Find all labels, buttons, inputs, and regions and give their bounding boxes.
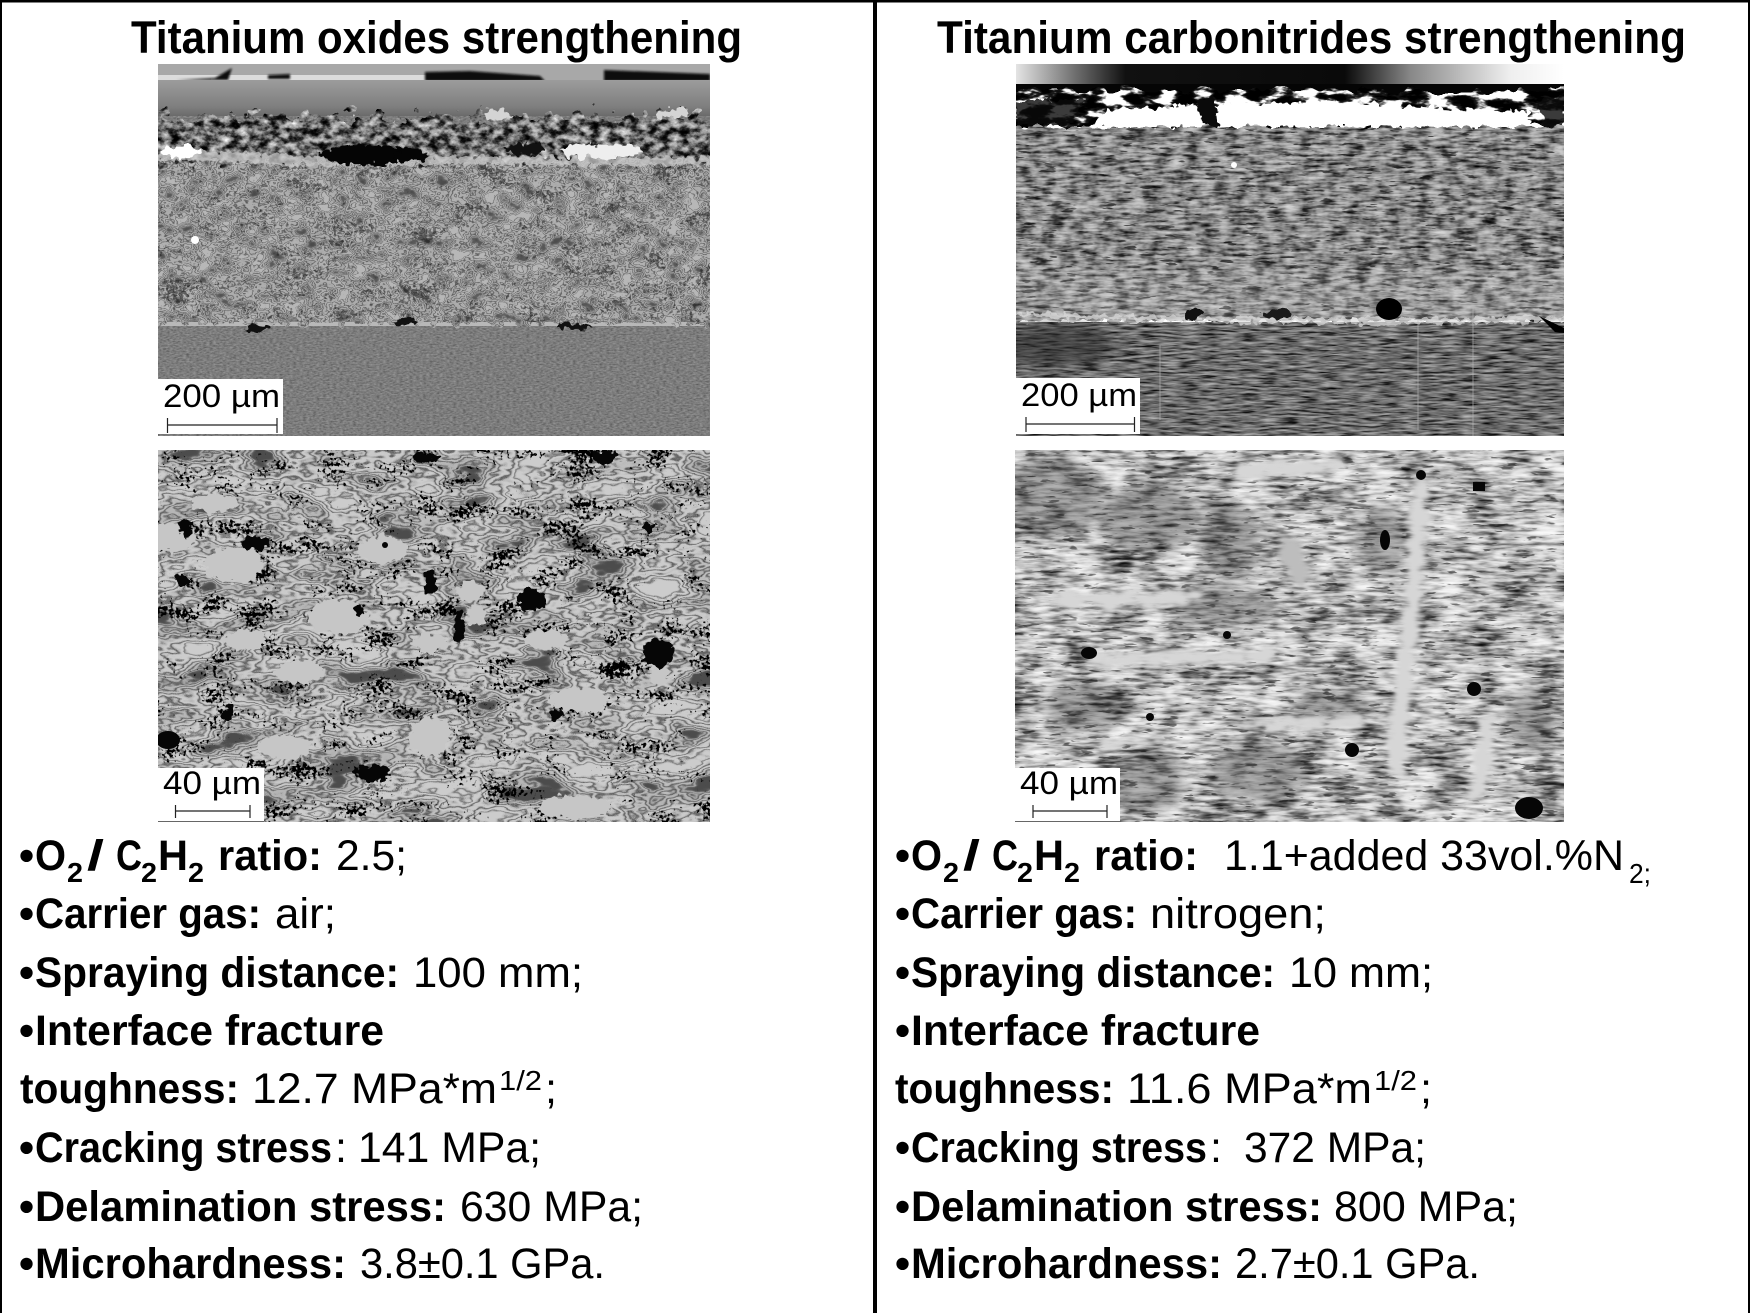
panel: titanium carbonitrides strengthening — [895, 12, 1686, 1288]
property: microhardness: 2.7±0.1 GPa. — [1235, 1240, 1480, 1288]
property: interface fracture toughness: toughness: — [20, 1065, 239, 1113]
scale label: 40 µm: 40 µm — [163, 765, 261, 801]
scale label: 40 µm — [158, 765, 264, 822]
property: interface fracture toughness: Interface fracture — [35, 1007, 384, 1055]
property: O2/C2H2 ratio: 2.5; — [336, 832, 407, 880]
property: O2/C2H2 ratio: 2 — [188, 857, 204, 888]
property: O2/C2H2 ratio: 2 — [67, 857, 83, 888]
property: O2/C2H2 ratio: O — [911, 832, 942, 880]
panel: titanium oxides strengthening — [19, 12, 742, 1288]
property: O2/C2H2 ratio: • — [19, 832, 34, 880]
property: spraying distance: 10 mm; — [1289, 949, 1433, 997]
scale label: 200 µm: 200 µm — [1021, 377, 1137, 413]
property: O2/C2H2 ratio: C — [116, 832, 142, 880]
property: delamination stress: 630 MPa; — [460, 1183, 643, 1231]
property list: oxides — [19, 832, 643, 1288]
property list: carbonitrides — [895, 832, 1651, 1288]
property: cracking stress: 141 MPa; — [358, 1124, 541, 1172]
property: microhardness: • — [895, 1240, 910, 1288]
property: delamination stress: Delamination stress: — [911, 1183, 1322, 1231]
property: interface fracture toughness — [895, 1007, 1432, 1113]
property: O2/C2H2 ratio: C — [992, 832, 1018, 880]
property: carrier gas: Carrier gas: — [911, 890, 1137, 938]
property: O2/C2H2 ratio: • — [895, 832, 910, 880]
property: microhardness: 3.8±0.1 GPa. — [360, 1240, 605, 1288]
micrograph: oxide coating cross-section, 200 µm — [140, 64, 730, 436]
property: O2/C2H2 ratio: H — [1034, 832, 1064, 880]
property: carrier gas: • — [19, 890, 34, 938]
property: O2/C2H2 ratio: O — [35, 832, 66, 880]
property: carrier gas: • — [895, 890, 910, 938]
property: O2/C2H2 ratio: 2; — [1629, 858, 1651, 889]
property: spraying distance: Spraying distance: — [35, 949, 399, 997]
property: delamination stress: • — [895, 1183, 910, 1231]
property: microhardness — [19, 1240, 605, 1288]
property: O2/C2H2 ratio: / — [963, 832, 980, 880]
micrograph: carbonitride coating cross-section, 200 µm — [995, 64, 1580, 436]
property: cracking stress: : — [1210, 1124, 1222, 1172]
property: spraying distance: • — [19, 949, 34, 997]
property: interface fracture toughness: • — [19, 1007, 34, 1055]
property: carrier gas: air; — [275, 890, 336, 938]
property: O2/C2H2 ratio: 2 — [1064, 857, 1080, 888]
property: microhardness: Microhardness: — [911, 1240, 1222, 1288]
property: carrier gas — [895, 890, 1326, 938]
property: interface fracture toughness: 11.6 MPa*m — [1127, 1065, 1372, 1113]
property: spraying distance — [19, 949, 583, 997]
property: carrier gas: Carrier gas: — [35, 890, 261, 938]
property: O2/C2H2 ratio: H — [158, 832, 188, 880]
property: cracking stress — [19, 1124, 541, 1172]
property: O2/C2H2 ratio: ratio: — [218, 832, 322, 880]
property: microhardness — [895, 1240, 1480, 1288]
property: O2/C2H2 ratio: 2 — [141, 857, 157, 888]
scale label: 200 µm — [1016, 377, 1140, 434]
property: delamination stress: Delamination stress: — [35, 1183, 446, 1231]
scale label: 40 µm: 40 µm — [1020, 765, 1118, 801]
property: O2/C2H2 ratio: 2 — [1017, 857, 1033, 888]
property: O2/C2H2 ratio — [895, 832, 1651, 889]
heading: titanium oxides strengthening: Titanium oxides strengthening — [131, 12, 742, 63]
property: interface fracture toughness: Interface fracture — [911, 1007, 1260, 1055]
property: O2/C2H2 ratio: ratio: — [1094, 832, 1198, 880]
scale label: 200 µm: 200 µm — [163, 378, 280, 414]
scale label: 200 µm — [158, 378, 283, 434]
property: interface fracture toughness: 12.7 MPa*m — [252, 1065, 497, 1113]
property: interface fracture toughness: 1/2 — [1374, 1065, 1417, 1096]
property: cracking stress — [895, 1124, 1426, 1172]
scale label: 40 µm — [1015, 765, 1120, 822]
property: delamination stress — [19, 1183, 643, 1231]
property: interface fracture toughness: • — [895, 1007, 910, 1055]
property: delamination stress: • — [19, 1183, 34, 1231]
property: spraying distance: Spraying distance: — [911, 949, 1275, 997]
property: O2/C2H2 ratio: 1.1+added 33vol.%N — [1224, 832, 1624, 880]
property: cracking stress: Cracking stress — [911, 1124, 1207, 1172]
property: O2/C2H2 ratio: / — [87, 832, 104, 880]
property: interface fracture toughness: toughness: — [895, 1065, 1114, 1113]
property: O2/C2H2 ratio — [19, 832, 407, 888]
property: interface fracture toughness: ; — [1420, 1065, 1432, 1113]
micrograph: carbonitride coating detail, 40 µm — [1002, 450, 1564, 822]
property: microhardness: Microhardness: — [35, 1240, 346, 1288]
property: O2/C2H2 ratio: 2 — [943, 857, 959, 888]
property: cracking stress: • — [19, 1124, 34, 1172]
property: cracking stress: Cracking stress — [35, 1124, 332, 1172]
property: delamination stress: 800 MPa; — [1334, 1183, 1518, 1231]
property: interface fracture toughness: 1/2 — [499, 1065, 542, 1096]
property: cracking stress: : — [335, 1124, 347, 1172]
property: interface fracture toughness: ; — [545, 1065, 557, 1113]
heading: titanium carbonitrides strengthening: Titanium carbonitrides strengthening — [937, 12, 1686, 63]
property: carrier gas: nitrogen; — [1150, 890, 1326, 938]
property: spraying distance: • — [895, 949, 910, 997]
property: cracking stress: 372 MPa; — [1244, 1124, 1426, 1172]
property: interface fracture toughness — [19, 1007, 557, 1113]
property: microhardness: • — [19, 1240, 34, 1288]
property: cracking stress: • — [895, 1124, 910, 1172]
micrograph: oxide coating detail, 40 µm — [148, 450, 710, 822]
property: delamination stress — [895, 1183, 1518, 1231]
property: spraying distance: 100 mm; — [413, 949, 583, 997]
